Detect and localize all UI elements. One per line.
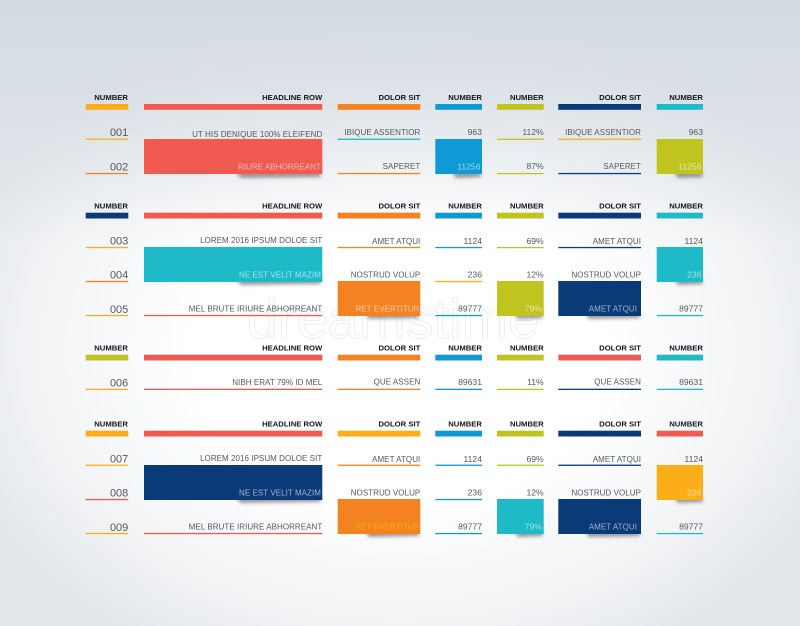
row 006: 11% [527, 377, 544, 387]
table block 2 [86, 202, 703, 319]
rows 003 to 005: 004 [110, 270, 128, 282]
rows 003 to 005: 89777 [458, 304, 482, 314]
row 006: QUE ASSEN [374, 378, 420, 386]
header row 1: NUMBER [448, 93, 482, 102]
rows 007 to 009: 009 [110, 522, 128, 534]
rows 001 and 002: 963 [468, 127, 482, 137]
header row 3: NUMBER [94, 344, 128, 352]
row 006: QUE ASSEN [594, 378, 641, 386]
header row 4: NUMBER [94, 420, 128, 428]
rows 007 to 009: AMET ATQUI [593, 455, 641, 464]
header row 4: NUMBER [510, 420, 544, 428]
row 006: 89631 [679, 377, 703, 387]
row 006: 89631 [458, 377, 482, 387]
rows 001 and 002: IBIQUE ASSENTIOR [344, 128, 420, 137]
rows 007 to 009: 007 [110, 454, 128, 466]
rows 007 to 009: RET EVERTITUR [356, 522, 420, 532]
header row 4: NUMBER [669, 420, 703, 428]
watermark: dreamstime [247, 287, 539, 350]
rows 001 and 002: SAPERET [603, 162, 641, 171]
header row 3 [86, 344, 703, 360]
rows 001 and 002: 963 [689, 127, 703, 137]
rows 003 to 005: NE EST VELIT MAZIM [239, 270, 321, 280]
rows 001 and 002: 11256 [678, 162, 702, 172]
header row 1: DOLOR SIT [599, 93, 641, 102]
rows 007 to 009: 008 [110, 488, 128, 500]
header row 3: NUMBER [448, 344, 482, 352]
rows 003 to 005: 12% [526, 270, 544, 280]
header row 4: HEADLINE ROW [262, 420, 323, 428]
rows 001 and 002: RIURE ABHORREANT [238, 162, 321, 172]
rows 003 to 005: RET EVERTITUR [356, 304, 420, 314]
row 006: NIBH ERAT 79% ID MEL [232, 378, 323, 387]
rows 003 to 005: 005 [110, 304, 128, 316]
rows 003 to 005: AMET ATQUI [593, 237, 641, 246]
rows 003 to 005: 236 [687, 270, 702, 280]
rows 007 to 009: 89777 [679, 522, 703, 532]
rows 003 to 005 [86, 236, 703, 319]
header row 2: HEADLINE ROW [262, 202, 323, 210]
header row 3: NUMBER [510, 344, 544, 352]
rows 007 to 009: 89777 [458, 522, 482, 532]
rows 007 to 009: AMET ATQUI [372, 455, 420, 464]
rows 007 to 009 [86, 454, 703, 537]
rows 001 and 002: 112% [522, 127, 544, 137]
rows 007 to 009: 236 [687, 488, 702, 498]
rows 001 and 002: 87% [526, 161, 544, 171]
header row 1: NUMBER [510, 93, 544, 102]
rows 001 and 002: 002 [110, 162, 128, 174]
rows 007 to 009: 69% [526, 454, 544, 464]
header row 1: NUMBER [94, 93, 128, 102]
rows 001 and 002 [86, 127, 703, 178]
header row 3: HEADLINE ROW [262, 344, 323, 352]
rows 003 to 005: NOSTRUD VOLUP [571, 270, 641, 280]
header row 2: DOLOR SIT [599, 202, 641, 210]
header row 1: DOLOR SIT [378, 93, 421, 102]
header row 4: DOLOR SIT [378, 420, 421, 428]
header row 1: HEADLINE ROW [262, 93, 323, 102]
rows 003 to 005: AMET ATQUI [372, 237, 420, 246]
header row 4: DOLOR SIT [599, 420, 641, 428]
table block 1 [86, 93, 703, 178]
header row 3: NUMBER [669, 344, 703, 352]
header row 1 [86, 93, 703, 110]
rows 003 to 005: 89777 [679, 304, 703, 314]
header row 2: NUMBER [669, 202, 703, 210]
header row 2: NUMBER [448, 202, 482, 210]
header row 2 [86, 202, 703, 218]
table block 4 [86, 420, 703, 537]
rows 007 to 009: 236 [468, 488, 482, 498]
rows 001 and 002: IBIQUE ASSENTIOR [565, 128, 641, 137]
rows 001 and 002: 11256 [457, 162, 481, 172]
rows 003 to 005: 1124 [685, 236, 703, 246]
rows 003 to 005: MEL BRUTE IRIURE ABHORREANT [189, 304, 322, 314]
row 006 [86, 377, 703, 390]
rows 001 and 002: SAPERET [383, 162, 420, 171]
rows 007 to 009: NOSTRUD VOLUP [571, 488, 641, 498]
rows 003 to 005: NOSTRUD VOLUP [351, 270, 420, 280]
rows 003 to 005: LOREM 2016 IPSUM DOLOE SIT [200, 236, 322, 245]
rows 007 to 009: 79% [525, 522, 542, 532]
rows 003 to 005: 69% [526, 236, 544, 246]
header row 4: NUMBER [448, 420, 482, 428]
rows 003 to 005: 003 [110, 236, 128, 248]
header row 2: NUMBER [94, 202, 128, 210]
rows 007 to 009: 12% [526, 488, 544, 498]
header row 4 [86, 420, 703, 436]
rows 001 and 002: UT HIS DENIQUE 100% ELEIFEND [192, 130, 322, 139]
header row 2: DOLOR SIT [378, 202, 421, 210]
header row 3: DOLOR SIT [378, 344, 421, 352]
rows 007 to 009: MEL BRUTE IRIURE ABHORREANT [189, 522, 322, 532]
rows 007 to 009: 1124 [464, 454, 482, 464]
table block 3 [86, 344, 703, 390]
rows 001 and 002: 001 [110, 127, 128, 139]
header row 2: NUMBER [510, 202, 544, 210]
rows 003 to 005: 236 [468, 270, 482, 280]
rows 007 to 009: LOREM 2016 IPSUM DOLOE SIT [200, 454, 322, 463]
rows 007 to 009: AMET ATQUI [589, 522, 637, 532]
rows 003 to 005: 79% [525, 304, 542, 314]
header row 3: DOLOR SIT [599, 344, 641, 352]
rows 003 to 005: AMET ATQUI [589, 304, 637, 314]
rows 007 to 009: NOSTRUD VOLUP [351, 488, 420, 498]
rows 007 to 009: NE EST VELIT MAZIM [239, 488, 321, 498]
rows 007 to 009: 1124 [685, 454, 703, 464]
row 006: 006 [110, 378, 128, 390]
rows 003 to 005: 1124 [464, 236, 482, 246]
header row 1: NUMBER [669, 93, 703, 102]
